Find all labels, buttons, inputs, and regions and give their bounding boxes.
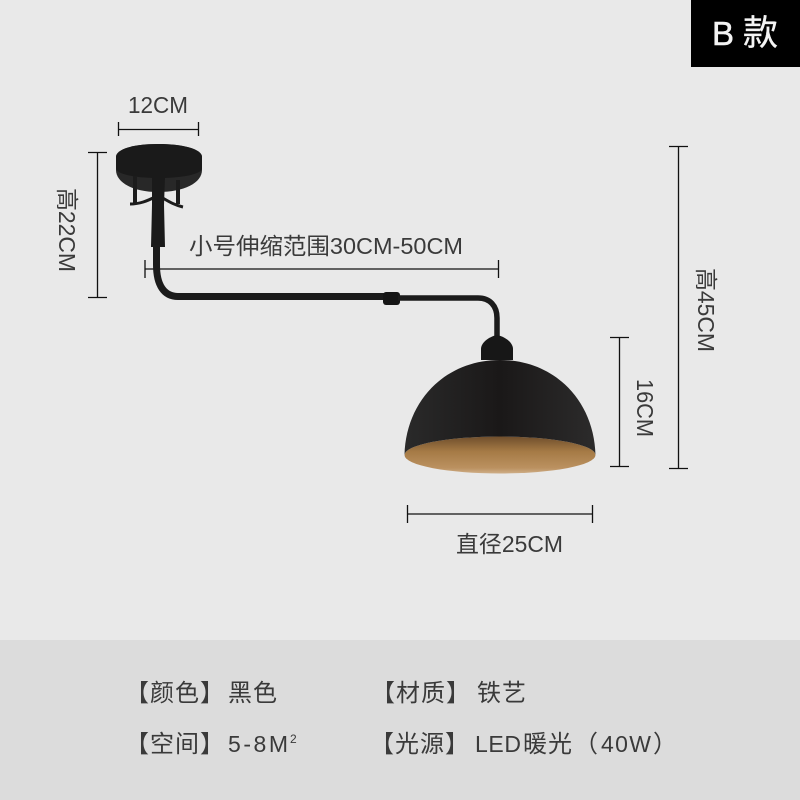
dimension: shade height 16CM: 16CM (632, 379, 658, 437)
panel: model badge: 款 (743, 14, 778, 53)
lamp: swing arm wall lamp (116, 144, 596, 474)
spec: light source: LED (475, 731, 521, 757)
spec: material: 【材质】 (371, 680, 471, 707)
dimension: canopy width 12CM: 12CM (128, 92, 188, 118)
dimension: total height 高45CM (669, 146, 719, 468)
lamp shade interior (404, 436, 596, 474)
spec: light source: 【光源】 (370, 731, 470, 758)
spec: space: 【空间】 (125, 731, 225, 758)
upper arm (398, 298, 497, 337)
spec: light source: （ (574, 731, 599, 758)
spec: colour: 【颜色】 (125, 680, 225, 707)
dimension: telescoping range: 小号伸缩范围30CM-50CM (189, 233, 463, 259)
lamp shade dome (404, 360, 596, 455)
sleeve joint (383, 292, 400, 305)
spec: space: 2 (290, 732, 297, 746)
dimension: mount height 高22CM: 高22CM (54, 188, 80, 272)
canopy mount (116, 144, 202, 247)
dimension: shade height 16CM (610, 338, 658, 466)
spec: light source: 暖光 (523, 731, 573, 758)
dimension: diameter 直径25CM: 直径25CM (456, 531, 563, 557)
spec: colour: 黑色 (228, 680, 278, 707)
spec: space (125, 731, 297, 758)
dimension: mount height 高22CM (54, 152, 107, 298)
spec: light source (370, 731, 678, 758)
arm (156, 245, 390, 296)
panel: model badge: B (712, 15, 734, 52)
socket (481, 335, 513, 360)
spec: material (371, 680, 527, 707)
spec: colour (125, 680, 278, 707)
spec: light source: 40W (601, 731, 651, 757)
dimension: total height 高45CM: 高45CM (693, 268, 719, 352)
dimension: diameter 直径25CM (408, 505, 592, 557)
panel: model badge (691, 0, 800, 67)
panel: specifications (0, 640, 800, 800)
spec: light source: ） (653, 731, 678, 758)
dimension: canopy width 12CM (118, 92, 198, 136)
spec: space: 5-8M (228, 731, 288, 757)
dimension: telescoping range (145, 233, 498, 278)
spec: material: 铁艺 (477, 680, 527, 707)
